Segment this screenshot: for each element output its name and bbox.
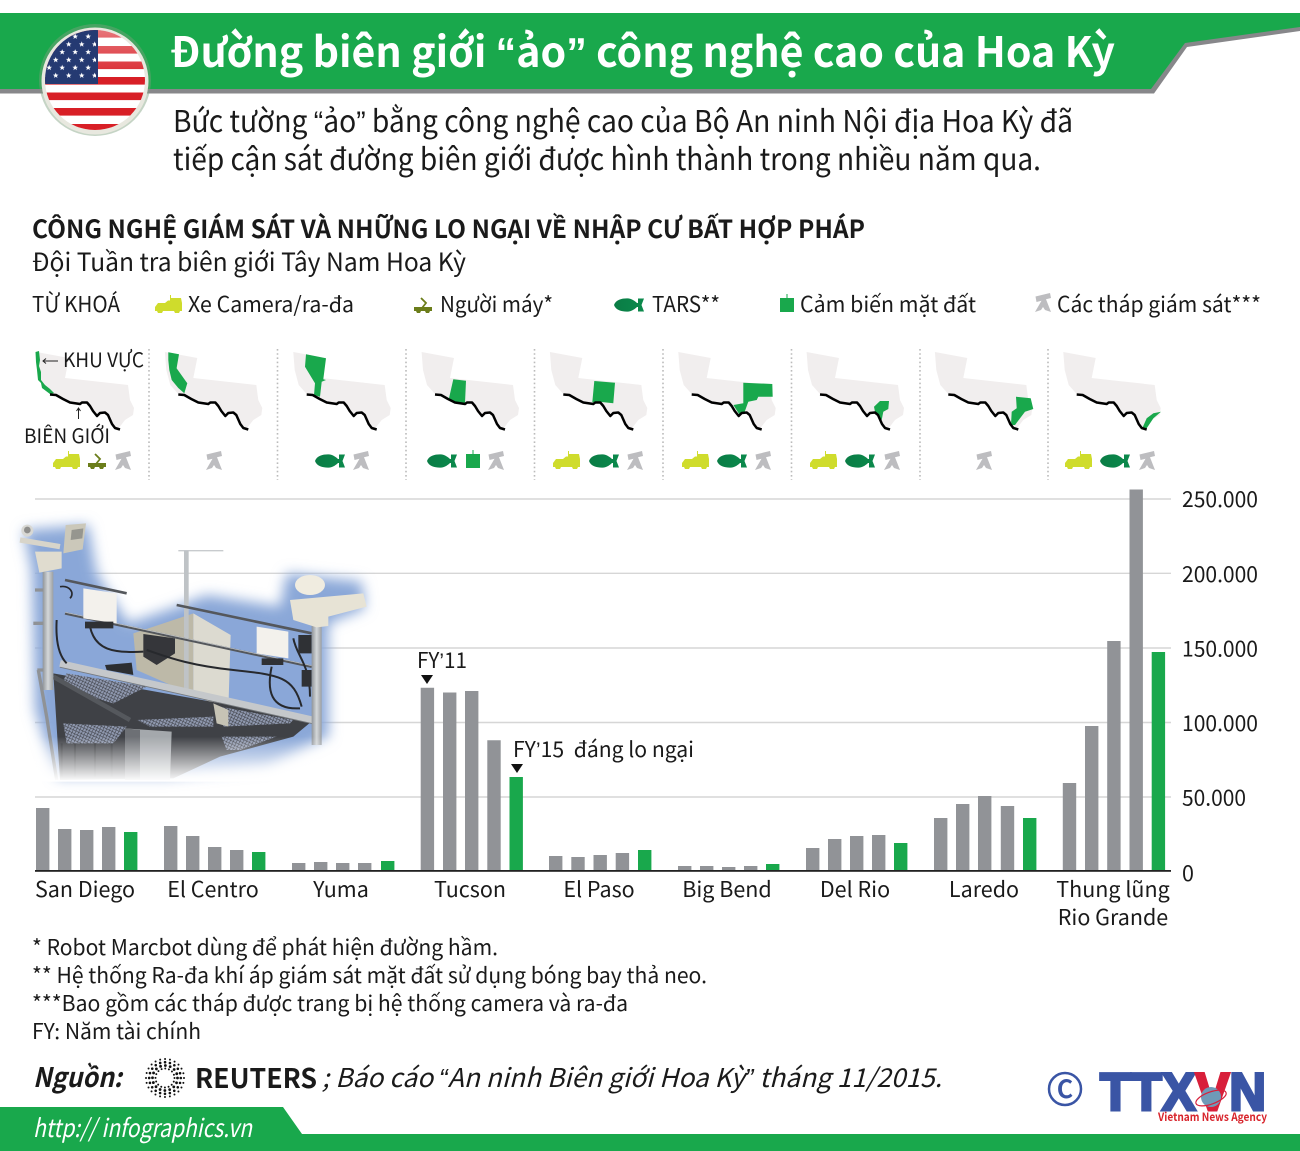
- footnotes: ***Bao gồm các tháp được trang bị hệ thống camera và ra-đa: [32, 987, 628, 1018]
- cables: [56, 620, 310, 708]
- footnotes: ** Hệ thống Ra-đa khí áp giám sát mặt đất sử dụng bóng bay thả neo.: [32, 959, 707, 990]
- source line: Nguồn:: [33, 1056, 124, 1095]
- y axis labels: [1182, 483, 1258, 888]
- bar chart: border apprehensions by sector: [35, 490, 1171, 872]
- y axis labels: 150.000: [1182, 632, 1258, 664]
- panel: Yuma map: [293, 352, 391, 470]
- category labels: San Diego: [35, 873, 135, 904]
- hut: [133, 613, 193, 695]
- panel: Rio Grande Valley map: [1063, 352, 1161, 470]
- category labels: [35, 873, 1170, 932]
- intro text: Bức tường “ảo” bằng công nghệ cao của Bộ An ninh Nội địa Hoa Kỳ đã: [173, 97, 1073, 141]
- left cameras: [21, 525, 33, 537]
- y axis labels: 100.000: [1182, 707, 1258, 738]
- legend: Xe Camera/ra-đa: [188, 288, 354, 319]
- logo: TTXVN: TTXVN: [1100, 1063, 1266, 1122]
- Yuma bars: [292, 862, 371, 871]
- right cameras: [295, 575, 325, 595]
- panel: Laredo map: [935, 352, 1033, 470]
- map annotation: border: BIÊN GIỚI: [24, 420, 110, 449]
- callout: FY'15: FY’15 đáng lo ngại: [513, 733, 694, 764]
- Laredo bars: [934, 796, 1014, 871]
- legend: TỪ KHOÁ: [32, 288, 120, 319]
- icon: copyright mark: [1049, 1070, 1081, 1106]
- rails: [65, 580, 312, 667]
- El Centro bars: [164, 826, 243, 871]
- El Paso bars: [549, 853, 629, 871]
- legend: [32, 288, 1261, 319]
- category labels: Del Rio: [820, 873, 890, 904]
- map annotation: border: [24, 408, 110, 449]
- category labels: El Centro: [167, 873, 259, 904]
- photo: surveillance tower: [20, 523, 367, 782]
- panel: Big Bend map: [678, 352, 776, 470]
- Rio Grande Valley bars: [1063, 490, 1143, 871]
- footer url: http:// infographics.vn: [33, 1109, 253, 1145]
- panel: El Paso map: [550, 352, 647, 470]
- section heading: CÔNG NGHỆ GIÁM SÁT VÀ NHỮNG LO NGẠI VỀ NHẬP CƯ BẤT HỢP PHÁP: [32, 210, 865, 246]
- category labels: Thung lũng: [1056, 873, 1170, 904]
- Big Bend bars: [678, 866, 757, 871]
- deck: [53, 673, 313, 780]
- source line: ; Báo cáo “An ninh Biên giới Hoa Kỳ” tháng 11/2015.: [322, 1058, 942, 1095]
- map annotation: region: KHU VỰC: [63, 344, 144, 373]
- intro text: tiếp cận sát đường biên giới được hình thành trong nhiều năm qua.: [173, 135, 1041, 179]
- category labels: Yuma: [312, 873, 369, 904]
- panel: San Diego map: [36, 351, 134, 470]
- y axis labels: 50.000: [1182, 782, 1246, 812]
- category labels: El Paso: [563, 873, 635, 904]
- legend: TARS**: [652, 288, 720, 319]
- icon: Reuters logo: [146, 1059, 184, 1097]
- source line: REUTERS: [195, 1057, 317, 1096]
- y axis labels: 0: [1182, 857, 1194, 888]
- panel: Del Rio map: [807, 352, 904, 470]
- icon: copyright mark: C: [1057, 1070, 1073, 1106]
- category labels: Rio Grande: [1058, 901, 1168, 932]
- legend: Người máy*: [440, 288, 553, 319]
- title: Đường biên giới “ảo” công nghệ cao của Hoa Kỳ: [170, 19, 1115, 80]
- category labels: Tucson: [434, 873, 506, 904]
- footer banner: [0, 1107, 1300, 1151]
- footnotes: FY: Năm tài chính: [32, 1015, 201, 1046]
- footnotes: [32, 931, 707, 1046]
- intro text: [173, 97, 1073, 179]
- section subheading: Đội Tuần tra biên giới Tây Nam Hoa Kỳ: [32, 243, 466, 279]
- fade: [20, 737, 340, 782]
- poles: [43, 572, 53, 690]
- panel: El Centro map: [165, 352, 262, 470]
- logo: TTXVN: Vietnam News Agency: [1157, 1109, 1267, 1125]
- y axis labels: 200.000: [1182, 558, 1258, 589]
- junction boxes: [83, 588, 117, 623]
- callout: FY'11: FY’11: [417, 644, 467, 675]
- footnotes: * Robot Marcbot dùng để phát hiện đường hầm.: [32, 931, 498, 962]
- category labels: Big Bend: [682, 873, 772, 904]
- legend: Các tháp giám sát***: [1057, 288, 1261, 319]
- Del Rio bars: [806, 835, 885, 871]
- source line: [33, 1056, 942, 1097]
- icon: US flag badge: [39, 24, 151, 136]
- y axis labels: 250.000: [1182, 483, 1258, 514]
- Tucson bars: [421, 688, 501, 871]
- antenna: [178, 549, 223, 553]
- header banner: [0, 13, 1300, 94]
- San Diego bars: [36, 808, 115, 871]
- panel: Tucson map: [422, 352, 519, 470]
- category labels: Laredo: [949, 873, 1019, 904]
- dark flood lamp: [105, 663, 133, 675]
- legend: Cảm biến mặt đất: [800, 288, 976, 319]
- lower pillar: [125, 728, 172, 780]
